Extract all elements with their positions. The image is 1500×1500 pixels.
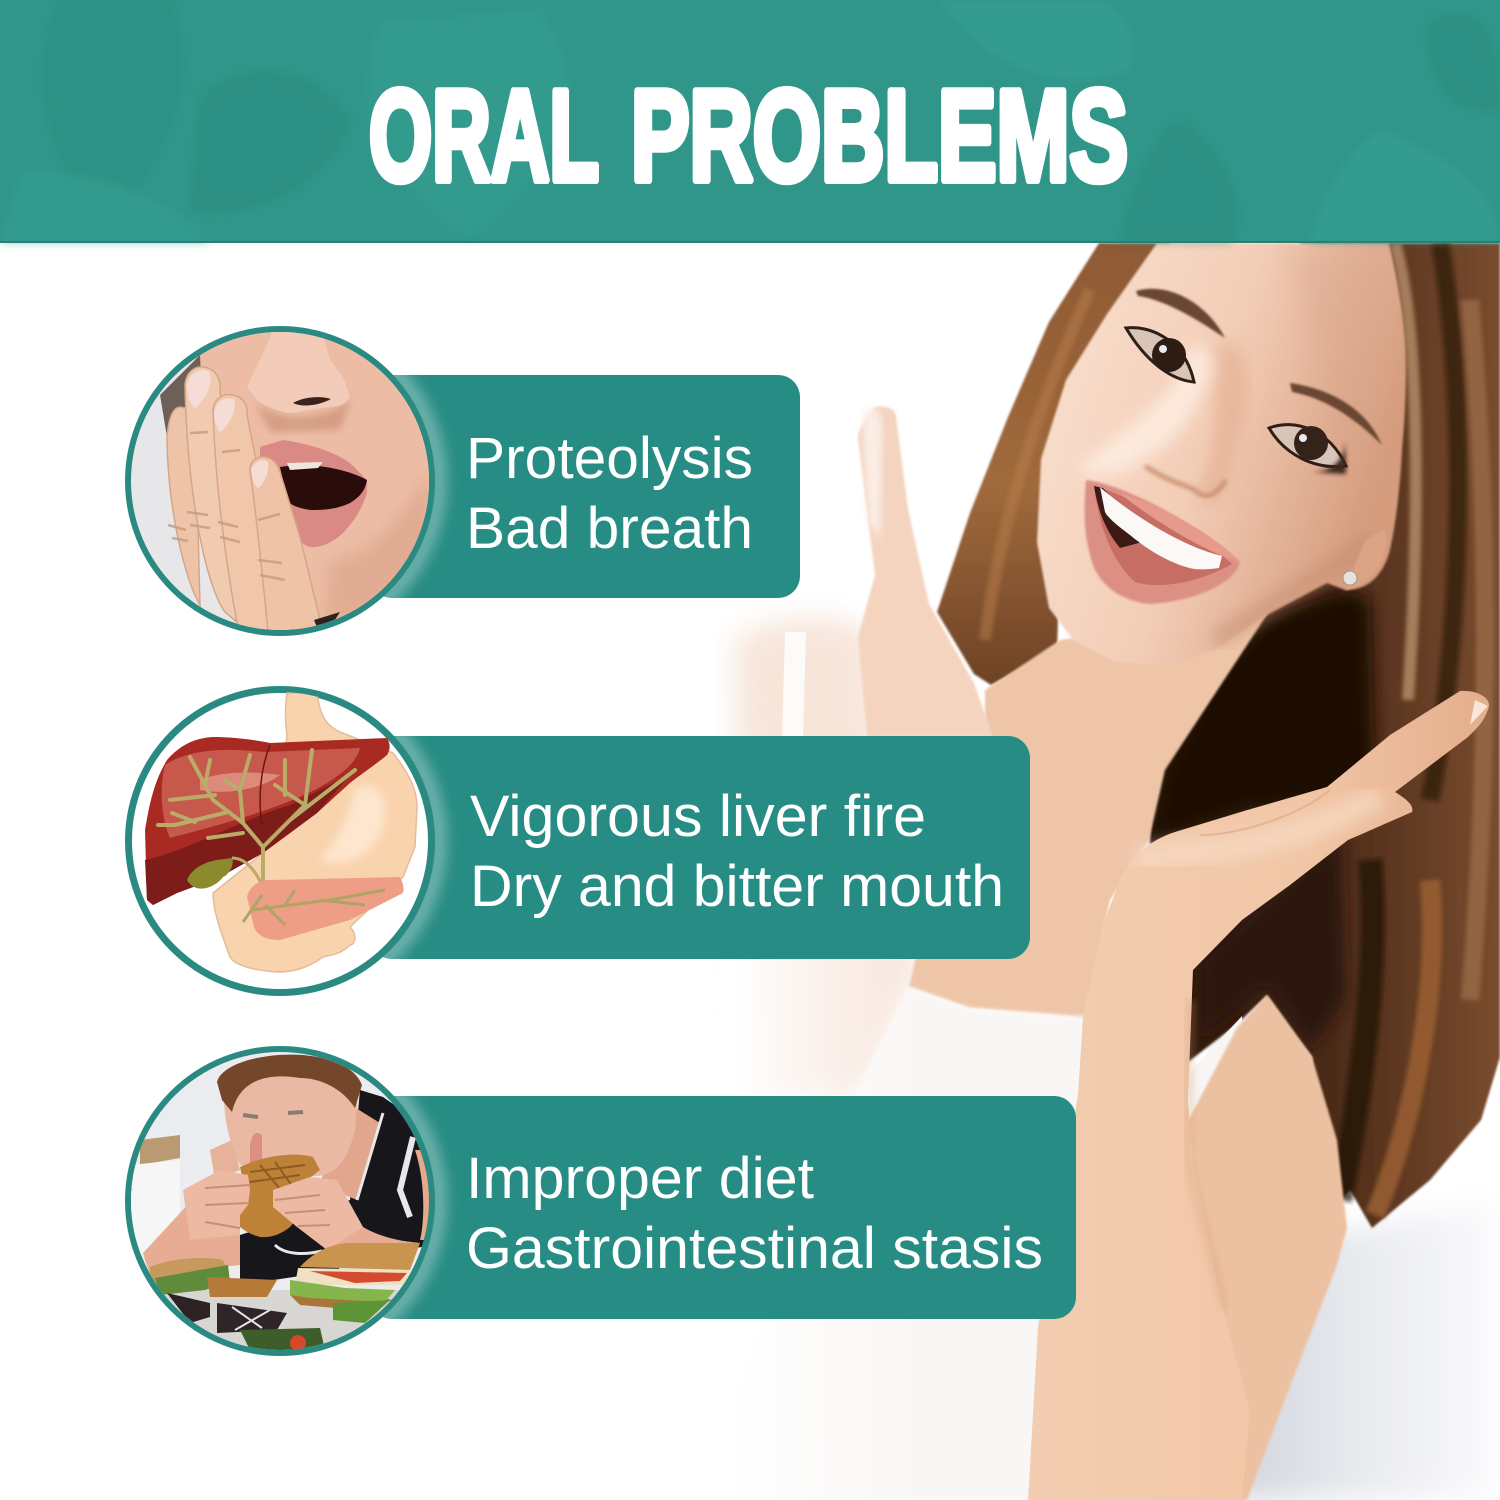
- circle ring: [128, 690, 432, 992]
- leaf texture: [0, 0, 1500, 243]
- shoulder: [210, 1140, 240, 1174]
- raised left hand: [858, 407, 993, 737]
- tank fabric at side: [1189, 1016, 1242, 1111]
- fingertip highlight: [862, 408, 882, 540]
- title: [369, 64, 1128, 208]
- left shoulder, faded: [735, 619, 920, 1100]
- pill glow: [383, 1096, 454, 1319]
- eyes: [1126, 328, 1346, 474]
- wall shadow at lower right: [1243, 1218, 1469, 1500]
- label text: Dry and bitter mouth: [470, 854, 1004, 919]
- black shirt under burger: [240, 1237, 340, 1285]
- bottom edge: [0, 241, 1500, 243]
- fingers: [167, 367, 322, 640]
- tank strap: [782, 632, 806, 740]
- face: [224, 1064, 358, 1176]
- fingernails: [187, 370, 268, 488]
- photo: man eating burger: [125, 1045, 435, 1355]
- eyes: [243, 1112, 303, 1117]
- neck and chest: [909, 610, 1270, 1020]
- burger: [233, 1155, 320, 1237]
- header banner: [0, 0, 1500, 243]
- mouth: [1085, 480, 1240, 604]
- right hand: [273, 1177, 363, 1250]
- pill glow: [383, 736, 454, 959]
- panel: improper diet / stasis: [122, 1043, 1076, 1359]
- title: PROBLEMS: [631, 64, 1128, 208]
- grilled sandwich: [207, 1277, 277, 1297]
- label text: Improper diet: [466, 1146, 814, 1211]
- white tank top: [862, 986, 1084, 1498]
- nose and cheek shading: [1080, 262, 1354, 648]
- label pill: [370, 736, 1030, 959]
- photo: hand over mouth: [131, 332, 429, 630]
- left sandwich: [150, 1258, 228, 1285]
- hair: [217, 1055, 362, 1112]
- circle ring: [128, 1050, 432, 1352]
- black tank: [240, 1090, 429, 1248]
- ear: [1345, 530, 1386, 590]
- nose: [247, 325, 352, 432]
- label text: Gastrointestinal stasis: [466, 1216, 1043, 1281]
- mouth: [260, 440, 367, 547]
- right sandwich: [290, 1243, 420, 1323]
- upper arm behind: [1190, 994, 1348, 1500]
- arms: [143, 1206, 240, 1275]
- left hand: [183, 1170, 250, 1240]
- label pill: [370, 1096, 1076, 1319]
- hair: [937, 243, 1500, 1228]
- pill glow: [384, 375, 454, 598]
- photo: smiling woman: [720, 243, 1500, 1500]
- eyebrows: [1136, 289, 1225, 338]
- panel: liver fire / dry mouth: [122, 683, 1030, 999]
- label text: [466, 1146, 1043, 1281]
- label text: [470, 784, 1004, 919]
- illustration: liver and stomach: [145, 693, 417, 972]
- table base: [125, 1290, 435, 1355]
- label text: [466, 426, 753, 561]
- title: ORAL: [369, 64, 599, 208]
- neck: [322, 1108, 379, 1200]
- donuts: [167, 1293, 210, 1323]
- label text: Proteolysis: [466, 426, 753, 491]
- panel: proteolysis / bad breath: [122, 320, 800, 640]
- circle ring: [128, 330, 432, 632]
- salad: [240, 1328, 325, 1350]
- label text: Bad breath: [466, 496, 753, 561]
- label pill: [370, 375, 800, 598]
- face: [1037, 243, 1406, 666]
- fade to white, left: [732, 960, 872, 1496]
- forearm and open right hand: [1028, 691, 1489, 1500]
- earring: [1343, 571, 1357, 585]
- label text: Vigorous liver fire: [470, 784, 926, 849]
